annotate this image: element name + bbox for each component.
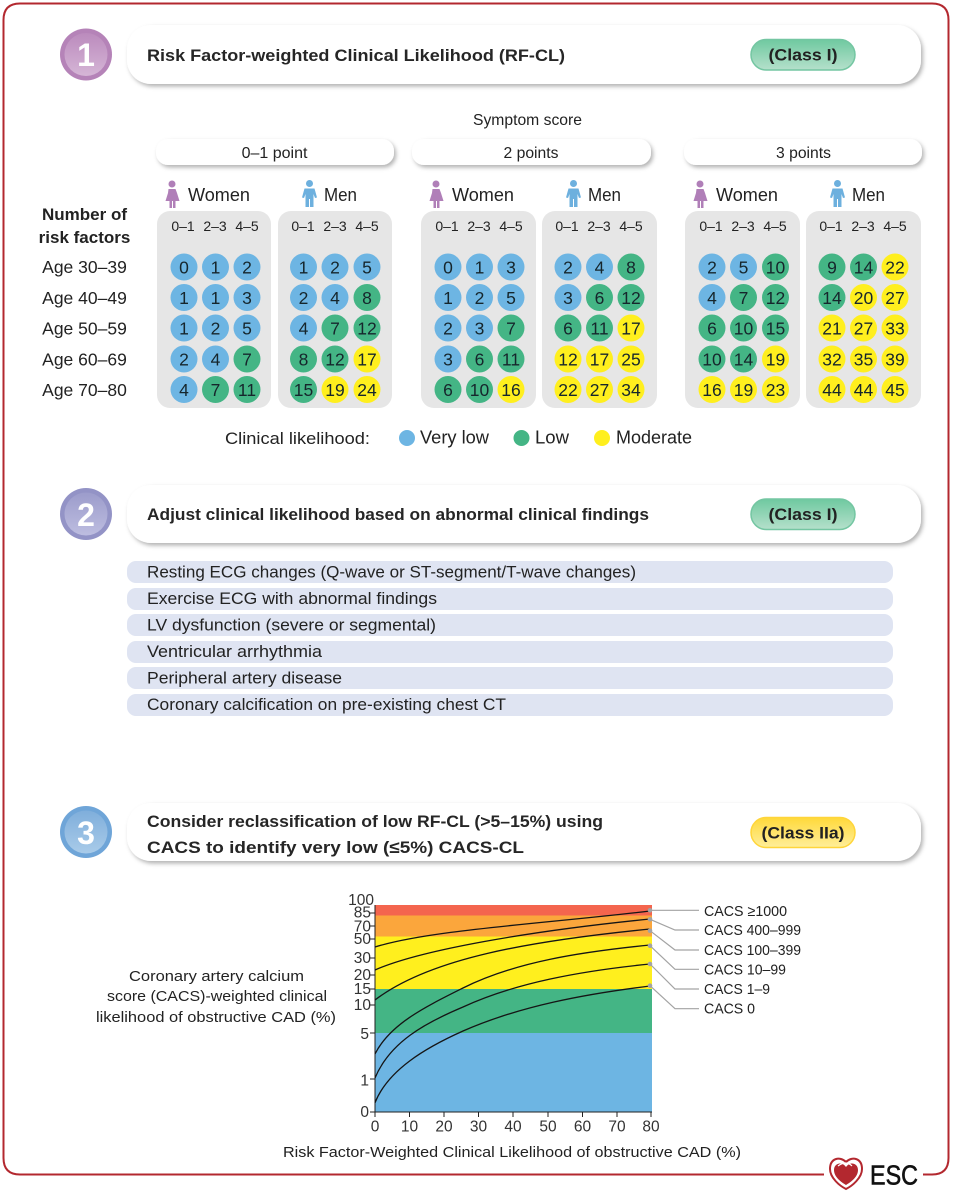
panel: 2 points women: 0–1 — [435, 218, 459, 234]
panel: 0-1 point women: 2 — [242, 257, 252, 277]
step 3 badge: 3 — [77, 815, 95, 851]
sex labels with person icons: Women — [452, 184, 514, 205]
panel: 3 points women: 15 — [766, 318, 785, 338]
abnormal clinical findings list: Coronary calcification on pre-existing chest CT — [147, 696, 506, 714]
panel: 2 points women: 16 — [501, 380, 521, 400]
panel: 2 points men: 4–5 — [619, 218, 643, 234]
y axis title: Coronary artery calcium — [129, 968, 304, 985]
panel: 2 points men: 12 — [621, 288, 641, 308]
panel: 2 points men: 11 — [590, 318, 609, 338]
panel: 0-1 point women: 7 — [242, 349, 252, 369]
panel: 2 points women: 7 — [506, 318, 516, 338]
chart: CACS-weighted clinical likelihood: 0 — [360, 1104, 369, 1121]
panel: 2 points men: 8 — [626, 257, 636, 277]
sex labels with person icons: Men — [588, 184, 621, 205]
step 2 badge — [60, 488, 112, 540]
panel: 0-1 point men: 1 — [299, 257, 308, 277]
CACS curve labels with leader lines: CACS 10–99 — [704, 962, 786, 978]
panel: 0-1 point men: 4 — [330, 288, 340, 308]
panel: 2 points women: 3 — [506, 257, 516, 277]
panel: 3 points women: 2–3 — [731, 218, 755, 234]
step 3 heading bar: CACS to identify very low (≤5%) CACS-CL — [147, 838, 524, 857]
panel: 3 points women: 19 — [766, 349, 785, 369]
abnormal clinical findings list: Resting ECG changes (Q-wave or ST-segment/T-wave changes) — [147, 564, 636, 582]
panel: 0-1 point men: 12 — [325, 349, 345, 369]
CACS curve labels with leader lines — [648, 903, 801, 1018]
panel: 2 points women: 5 — [506, 288, 516, 308]
row labels: Number of — [42, 205, 127, 224]
CACS curve labels with leader lines: CACS 400–999 — [704, 922, 801, 939]
panel: 0-1 point women: 5 — [242, 318, 252, 338]
panel: 0-1 point women: 1 — [179, 288, 189, 308]
chart: CACS-weighted clinical likelihood: 20 — [435, 1118, 453, 1136]
panel: 3 points women — [685, 211, 800, 408]
panel: 3 points women: 14 — [734, 349, 753, 369]
CACS curve labels with leader lines: CACS ≥1000 — [704, 903, 787, 920]
panel: 2 points men: 4 — [595, 257, 605, 277]
step 2 badge: 2 — [77, 497, 95, 533]
panel: 0-1 point women: 7 — [211, 380, 220, 400]
panel: 2 points women: 11 — [502, 349, 520, 369]
panel: 3 points men: 27 — [854, 318, 873, 338]
panel: 3 points men: 4–5 — [883, 218, 907, 234]
panel: 0-1 point women: 11 — [238, 380, 256, 400]
panel: 2 points women: 6 — [475, 349, 484, 369]
panel: 0-1 point men: 7 — [330, 318, 340, 338]
panel: 0-1 point men: 15 — [294, 380, 313, 400]
panel: 3 points women: 5 — [739, 257, 748, 277]
CACS curve labels with leader lines: CACS 100–399 — [704, 942, 801, 959]
panel: 3 points women: 23 — [766, 380, 785, 400]
panel: 0-1 point women: 1 — [211, 288, 220, 308]
panel: 3 points men: 32 — [822, 349, 842, 369]
panel: 3 points men — [806, 211, 921, 408]
legend: clinical likelihood: Low — [535, 428, 570, 448]
panel: 0-1 point women: 3 — [242, 288, 252, 308]
panel: 3 points women: 2 — [707, 257, 717, 277]
row labels — [39, 205, 130, 400]
panel: 2 points men: 2 — [563, 257, 573, 277]
panel: 3 points men: 9 — [827, 257, 837, 277]
chart: CACS-weighted clinical likelihood: 10 — [354, 997, 371, 1014]
panel: 3 points men: 22 — [885, 257, 905, 277]
step 2 heading bar: (Class I) — [768, 505, 838, 524]
step 3 heading bar: Consider reclassification of low RF-CL (>5–15%) using — [147, 812, 603, 831]
panel: 2 points women: 2–3 — [467, 218, 491, 234]
panel: 2 points men: 25 — [621, 349, 641, 369]
legend: clinical likelihood: Very low — [420, 428, 490, 448]
panel: 3 points women: 6 — [707, 318, 717, 338]
panel: 3 points men: 35 — [854, 349, 873, 369]
chart: CACS-weighted clinical likelihood: 15 — [354, 981, 371, 998]
symptom score column headers — [156, 139, 922, 165]
legend: clinical likelihood — [225, 428, 692, 448]
row labels: Age 50–59 — [42, 318, 127, 338]
panel: 0-1 point men: 2–3 — [323, 218, 347, 234]
chart: CACS-weighted clinical likelihood: 70 — [354, 918, 371, 936]
panel: 3 points men: 44 — [854, 380, 873, 400]
ESC logo: ESC — [870, 1160, 918, 1190]
sex labels with person icons: Women — [188, 184, 250, 205]
symptom score heading: Symptom score — [473, 112, 582, 129]
chart: CACS-weighted clinical likelihood: 40 — [504, 1118, 522, 1136]
panel: 0-1 point men: 2 — [330, 257, 340, 277]
step 3 heading bar — [127, 803, 921, 861]
panel: 0-1 point men: 8 — [299, 349, 308, 369]
panel: 3 points women: 10 — [734, 318, 753, 338]
panel: 3 points men: 39 — [885, 349, 905, 369]
panel: 2 points men: 12 — [558, 349, 578, 369]
panel: 3 points men: 20 — [854, 288, 873, 308]
chart: CACS-weighted clinical likelihood: 30 — [470, 1118, 487, 1136]
row labels: Age 30–39 — [42, 257, 127, 277]
chart: CACS-weighted clinical likelihood: 5 — [360, 1026, 369, 1043]
panel: 3 points men: 45 — [885, 380, 905, 400]
panel: 2 points men — [542, 211, 657, 408]
row labels: risk factors — [39, 228, 130, 247]
sex labels with person icons: Women — [716, 184, 778, 205]
panel: 0-1 point women: 2 — [211, 318, 220, 338]
panel: 2 points women: 10 — [470, 380, 489, 400]
step 2 heading bar — [127, 485, 921, 543]
panel: 2 points women: 1 — [475, 257, 484, 277]
step 1 heading bar — [127, 25, 921, 84]
panel: 0-1 point women: 0 — [179, 257, 189, 277]
panel: 0-1 point men: 8 — [362, 288, 372, 308]
sex labels with person icons: Men — [852, 184, 885, 205]
panel: 0-1 point women: 0–1 — [171, 218, 195, 234]
panel: 3 points women: 16 — [702, 380, 722, 400]
panel: 0-1 point men: 0–1 — [291, 218, 315, 234]
legend: clinical likelihood: Moderate — [616, 428, 692, 448]
panel: 0-1 point women: 2 — [179, 349, 189, 369]
x axis title: Risk Factor-Weighted Clinical Likelihood of obstructive CAD (%) — [283, 1144, 741, 1161]
panel: 3 points men: 21 — [822, 318, 842, 338]
legend: clinical likelihood: Clinical likelihood: — [225, 429, 370, 448]
chart: CACS-weighted clinical likelihood: 30 — [354, 950, 371, 967]
panel: 0-1 point women — [157, 211, 271, 408]
chart: CACS-weighted clinical likelihood: 1 — [360, 1072, 369, 1090]
panel: 0-1 point women: 1 — [179, 318, 189, 338]
chart: CACS-weighted clinical likelihood: 70 — [608, 1118, 626, 1136]
row labels: Age 70–80 — [42, 380, 127, 400]
chart: CACS-weighted clinical likelihood: 0 — [371, 1118, 380, 1136]
step 2 heading bar: Adjust clinical likelihood based on abnormal clinical findings — [147, 505, 649, 524]
panel: 2 points women: 3 — [443, 349, 453, 369]
chart: CACS-weighted clinical likelihood: 60 — [574, 1118, 591, 1136]
abnormal clinical findings list: LV dysfunction (severe or segmental) — [147, 616, 436, 634]
step 1 heading bar: (Class I) — [768, 46, 838, 64]
step 1 badge — [60, 28, 112, 80]
panel: 2 points women: 3 — [475, 318, 484, 338]
panel: 0-1 point men — [278, 211, 392, 408]
abnormal clinical findings list — [127, 561, 893, 716]
panel: 3 points women: 0–1 — [699, 218, 723, 234]
row labels: Age 40–49 — [42, 288, 127, 308]
chart: CACS-weighted clinical likelihood: 50 — [354, 931, 371, 948]
panel: 0-1 point women: 4–5 — [235, 218, 259, 234]
panel: 0-1 point men: 2 — [299, 288, 308, 308]
symptom score column headers: 3 points — [776, 145, 831, 162]
step 3 badge — [60, 806, 112, 858]
chart: CACS-weighted clinical likelihood: 50 — [539, 1118, 557, 1136]
panel: 3 points women: 10 — [766, 257, 785, 277]
panel: 2 points men: 34 — [621, 380, 641, 400]
panel: 0-1 point men: 12 — [357, 318, 377, 338]
chart: CACS-weighted clinical likelihood: 20 — [354, 967, 371, 984]
panel: 3 points men: 14 — [854, 257, 873, 277]
panel: 2 points men: 2–3 — [587, 218, 611, 234]
panel: 3 points women: 4–5 — [763, 218, 787, 234]
chart: CACS-weighted clinical likelihood — [348, 892, 660, 1136]
panel: 3 points men: 2–3 — [851, 218, 875, 234]
panel: 2 points women: 1 — [443, 288, 453, 308]
ESC logo — [830, 1159, 918, 1190]
row labels: Age 60–69 — [42, 350, 127, 370]
panel: 0-1 point men: 24 — [357, 380, 377, 400]
panel: 0-1 point women: 1 — [211, 257, 220, 277]
abnormal clinical findings list: Exercise ECG with abnormal findings — [147, 590, 437, 608]
y axis title: score (CACS)-weighted clinical — [107, 988, 327, 1005]
symptom score column headers: 2 points — [504, 145, 559, 162]
panel: 2 points women: 4–5 — [499, 218, 523, 234]
panel: 2 points men: 17 — [621, 318, 641, 338]
panel: 2 points men: 0–1 — [555, 218, 579, 234]
panel: 0-1 point women: 4 — [211, 349, 221, 369]
sex labels with person icons — [166, 180, 885, 208]
panel: 0-1 point men: 4–5 — [355, 218, 379, 234]
panel: 3 points women: 4 — [707, 288, 717, 308]
step 1 heading bar: Risk Factor-weighted Clinical Likelihood (RF-CL) — [147, 46, 565, 65]
panel: 2 points women: 0 — [443, 257, 453, 277]
panel: 2 points men: 6 — [563, 318, 573, 338]
panel: 2 points men: 27 — [590, 380, 609, 400]
panel: 2 points women — [421, 211, 536, 408]
panel: 3 points men: 27 — [885, 288, 905, 308]
panel: 2 points women: 6 — [443, 380, 453, 400]
y axis title: likelihood of obstructive CAD (%) — [96, 1009, 336, 1026]
sex labels with person icons: Men — [324, 184, 357, 205]
chart: CACS-weighted clinical likelihood: 85 — [354, 904, 371, 922]
panel: 0-1 point women: 2–3 — [203, 218, 227, 234]
y axis title — [96, 968, 336, 1026]
panel: 2 points men: 6 — [595, 288, 604, 308]
panel: 0-1 point women: 4 — [179, 380, 189, 400]
panel: 3 points women: 12 — [766, 288, 785, 308]
abnormal clinical findings list: Peripheral artery disease — [147, 670, 342, 688]
panel: 3 points women: 19 — [734, 380, 753, 400]
panel: 3 points men: 14 — [822, 288, 842, 308]
step 3 heading bar: (Class IIa) — [762, 824, 844, 842]
symptom score column headers: 0–1 point — [242, 145, 308, 162]
panel: 0-1 point men: 5 — [362, 257, 372, 277]
chart: CACS-weighted clinical likelihood: 100 — [348, 892, 374, 909]
abnormal clinical findings list: Ventricular arrhythmia — [147, 643, 323, 661]
panel: 2 points men: 22 — [558, 380, 578, 400]
panel: 3 points men: 0–1 — [819, 218, 843, 234]
CACS curve labels with leader lines: CACS 0 — [704, 1000, 755, 1018]
panel: 3 points men: 44 — [822, 380, 842, 400]
panel: 0-1 point men: 19 — [325, 380, 345, 400]
panel: 3 points men: 33 — [885, 318, 905, 338]
chart: CACS-weighted clinical likelihood: 80 — [642, 1118, 660, 1136]
chart: CACS-weighted clinical likelihood: 10 — [401, 1118, 418, 1136]
panel: 0-1 point men: 17 — [357, 349, 377, 369]
step 1 badge: 1 — [77, 37, 95, 73]
panel: 2 points men: 3 — [563, 288, 573, 308]
panel: 3 points women: 7 — [739, 288, 748, 308]
panel: 3 points women: 10 — [702, 349, 722, 369]
panel: 2 points men: 17 — [590, 349, 609, 369]
panel: 2 points women: 2 — [443, 318, 453, 338]
panel: 2 points women: 2 — [475, 288, 484, 308]
panel: 0-1 point men: 4 — [299, 318, 309, 338]
CACS curve labels with leader lines: CACS 1–9 — [704, 981, 770, 998]
